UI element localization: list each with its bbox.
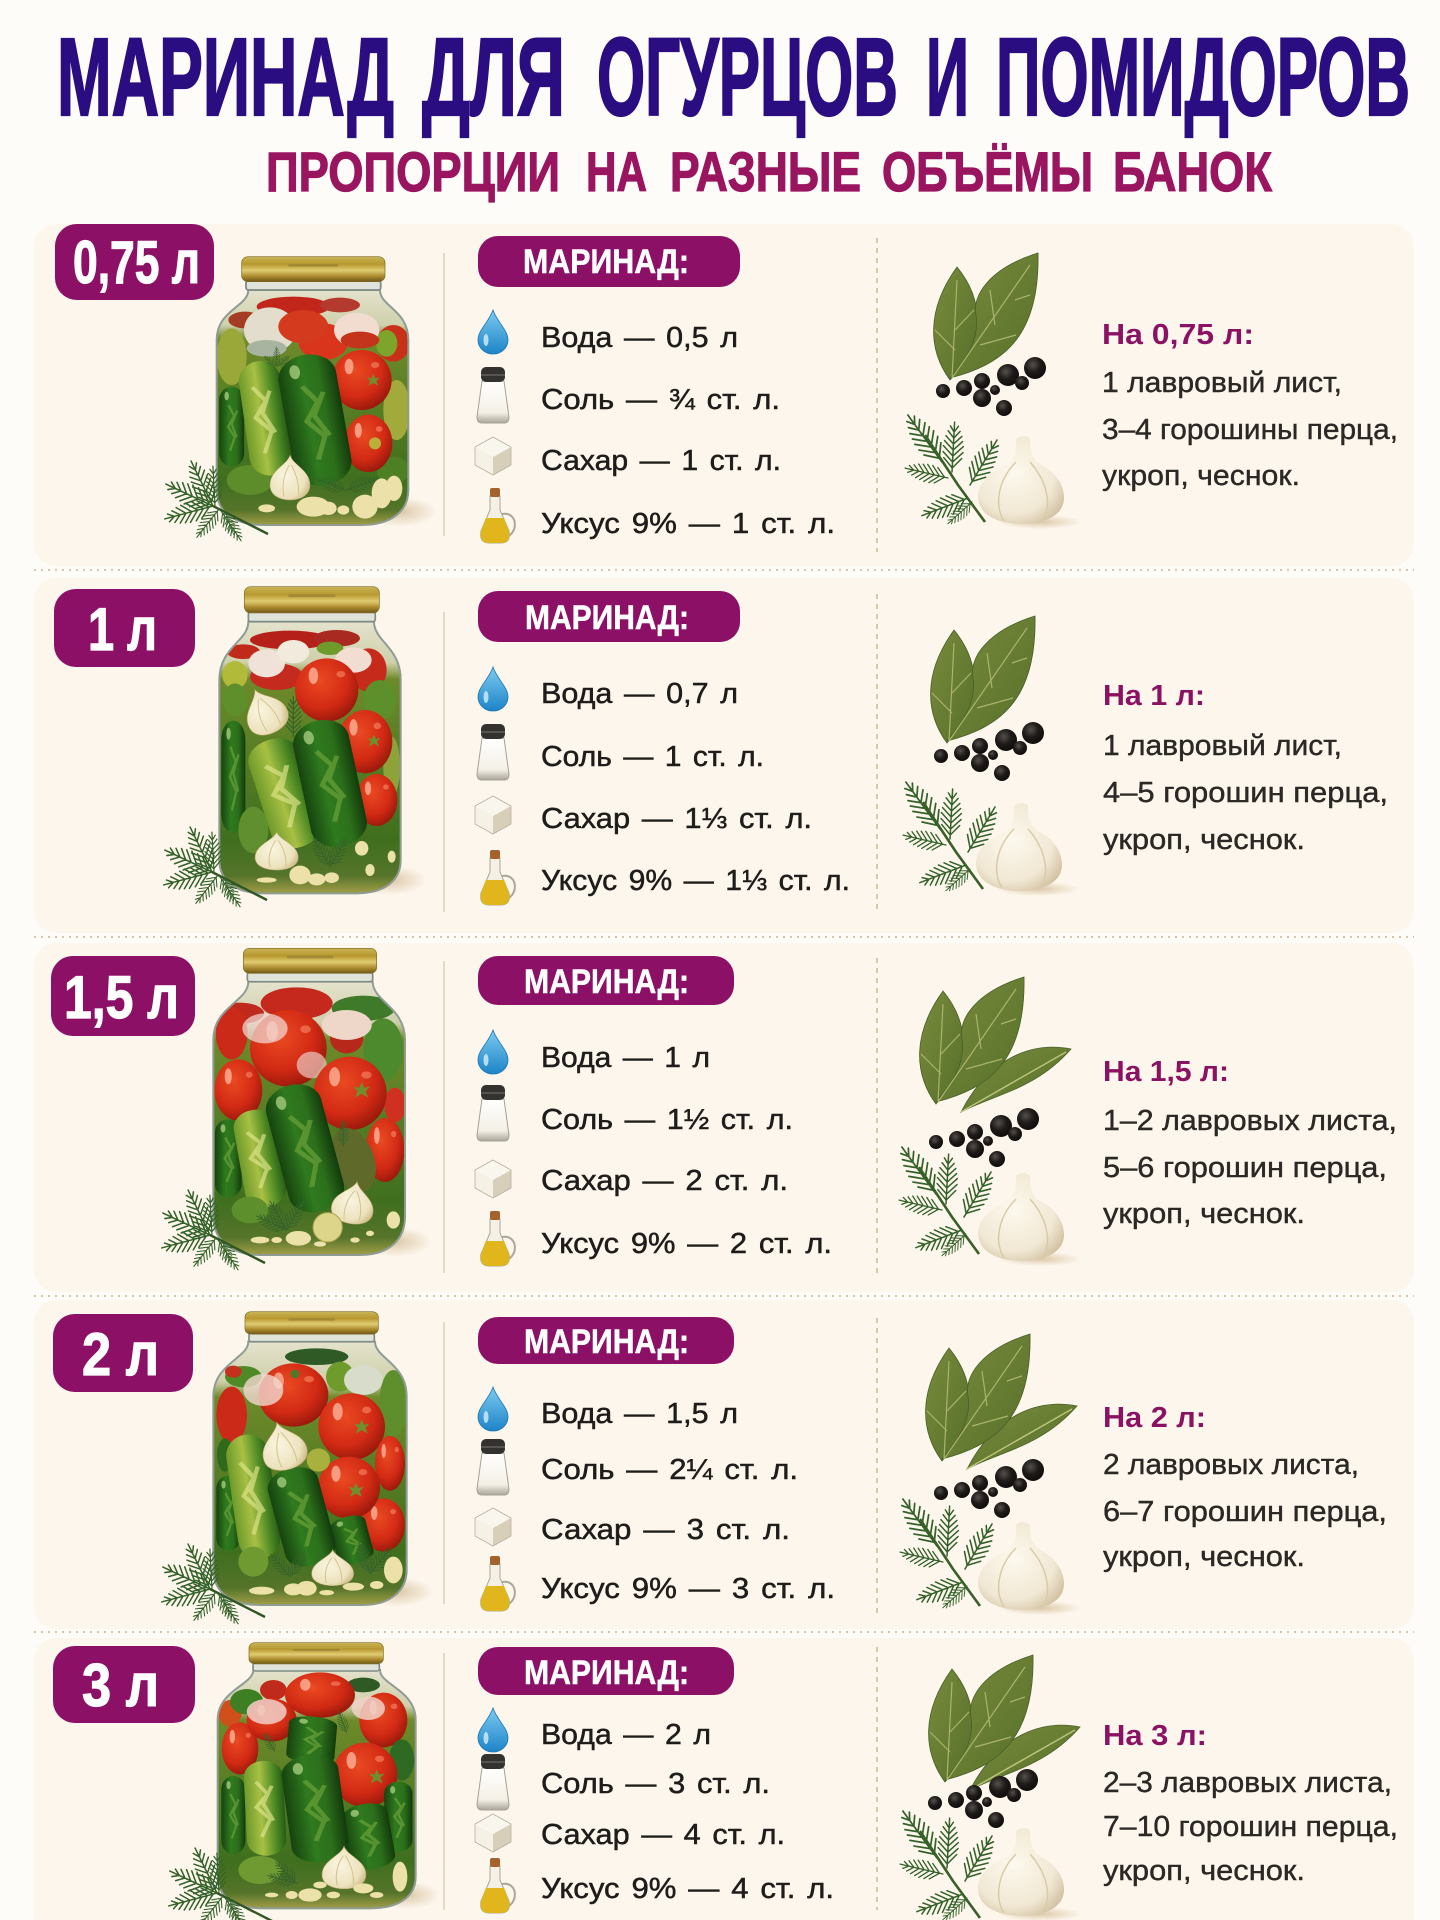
dill at jar: [160, 823, 267, 911]
ingredient: vinegar: [481, 1211, 832, 1266]
jar 1 л: [217, 587, 427, 895]
spices text: укроп, чеснок.: [1103, 1855, 1305, 1887]
spices text: 3–4 горошины перца,: [1102, 414, 1398, 446]
ingredient: salt: Соль — 1½ ст. л.: [541, 1104, 793, 1136]
jar 1,5 л: [210, 948, 432, 1257]
subtitle: [266, 140, 1273, 203]
ingredient: vinegar: [481, 1556, 835, 1611]
ingredient: salt: [477, 1439, 798, 1495]
ingredient: salt: [477, 367, 780, 423]
spices text: На 3 л:: [1103, 1720, 1207, 1752]
spices text: 1–2 лавровых листа,: [1103, 1105, 1397, 1137]
spices text: укроп, чеснок.: [1103, 1198, 1305, 1230]
ingredient: sugar: Сахар — 3 ст. л.: [541, 1514, 790, 1546]
spices text: [1103, 1720, 1398, 1887]
marinade pill: МАРИНАД:: [524, 1654, 689, 1692]
spices text: На 0,75 л:: [1102, 319, 1254, 351]
spices text: [1103, 1056, 1397, 1230]
ingredient: vinegar: Уксус 9% — 2 ст. л.: [541, 1228, 832, 1260]
title: ОГУРЦОВ: [597, 16, 898, 139]
ingredient: salt: Соль — 2¼ ст. л.: [541, 1454, 798, 1486]
subtitle: РАЗНЫЕ: [670, 140, 861, 203]
ingredient: water: Вода — 0,5 л: [541, 322, 738, 354]
subtitle: НА: [586, 140, 647, 203]
jar 2 л: [210, 1312, 433, 1607]
ingredient: vinegar: Уксус 9% — 3 ст. л.: [541, 1573, 835, 1605]
dill at jar: [165, 1844, 272, 1920]
title: МАРИНАД: [57, 16, 394, 139]
marinade pill: МАРИНАД:: [523, 243, 689, 281]
spices text: На 2 л:: [1103, 1402, 1206, 1434]
subtitle: БАНОК: [1113, 140, 1273, 203]
ingredient: water: Вода — 2 л: [541, 1719, 711, 1751]
spices text: укроп, чеснок.: [1103, 824, 1305, 856]
panel: 1 л: [34, 578, 1414, 933]
ingredient: vinegar: Уксус 9% — 1 ст. л.: [541, 508, 835, 540]
panel: 2 л: [34, 1300, 1414, 1629]
volume badge: [53, 1646, 195, 1723]
spices illustration: [899, 253, 1082, 529]
marinade pill: [478, 956, 734, 1005]
ingredient: vinegar: [481, 850, 850, 905]
title: ДЛЯ: [422, 16, 565, 139]
title: [57, 16, 1410, 139]
ingredient: sugar: [475, 796, 812, 835]
ingredient: salt: [477, 1085, 793, 1141]
volume badge: 0,75 л: [73, 229, 200, 296]
ingredient: water: [478, 667, 738, 711]
spices text: 4–5 горошин перца,: [1103, 777, 1388, 809]
ingredient: sugar: [475, 1508, 790, 1546]
ingredient: sugar: Сахар — 1 ст. л.: [541, 445, 781, 477]
volume badge: 2 л: [82, 1321, 159, 1388]
ingredient: salt: Соль — 1 ст. л.: [541, 741, 764, 773]
spices text: 7–10 горошин перца,: [1103, 1811, 1398, 1843]
spices text: [1103, 1402, 1387, 1573]
marinade pill: МАРИНАД:: [524, 963, 689, 1001]
volume badge: 3 л: [82, 1652, 159, 1719]
ingredient: water: Вода — 1 л: [541, 1042, 710, 1074]
spices text: 5–6 горошин перца,: [1103, 1152, 1387, 1184]
ingredient: water: Вода — 0,7 л: [541, 678, 738, 710]
ingredient: water: [478, 1708, 711, 1752]
dill at jar: [158, 1540, 265, 1628]
spices text: 1 лавровый лист,: [1103, 730, 1342, 762]
ingredient: sugar: [475, 1160, 788, 1198]
spices text: 2 лавровых листа,: [1103, 1449, 1359, 1481]
spices text: 1 лавровый лист,: [1102, 367, 1342, 399]
dill at jar: [161, 457, 268, 545]
ingredient: salt: Соль — ¾ ст. л.: [541, 384, 780, 416]
volume badge: [53, 1314, 193, 1392]
spices text: [1103, 680, 1388, 856]
jar 0,75 л: [213, 257, 437, 527]
ingredient: water: [478, 1030, 710, 1074]
subtitle: ПРОПОРЦИИ: [266, 140, 560, 203]
spices text: 2–3 лавровых листа,: [1103, 1767, 1392, 1799]
volume badge: 1 л: [88, 596, 157, 663]
ingredient: vinegar: [481, 1858, 834, 1913]
spices text: На 1,5 л:: [1103, 1056, 1229, 1088]
volume badge: [54, 589, 195, 667]
subtitle: ОБЪЁМЫ: [882, 140, 1093, 203]
marinade pill: [478, 236, 740, 287]
title: И: [926, 16, 969, 139]
ingredient: salt: [477, 1754, 770, 1810]
spices illustration: [894, 1655, 1082, 1920]
ingredient: water: [478, 310, 738, 354]
marinade pill: МАРИНАД:: [525, 599, 689, 637]
spices text: [1102, 319, 1398, 492]
spices illustration: [894, 1334, 1082, 1615]
ingredient: water: [478, 1387, 738, 1431]
panel: 0,75 л: [34, 224, 1414, 566]
ingredient: sugar: Сахар — 2 ст. л.: [541, 1165, 788, 1197]
spices text: укроп, чеснок.: [1103, 1541, 1305, 1573]
spices text: укроп, чеснок.: [1102, 460, 1300, 492]
ingredient: sugar: [475, 437, 781, 477]
spices text: На 1 л:: [1103, 680, 1205, 712]
ingredient: vinegar: Уксус 9% — 1⅓ ст. л.: [541, 865, 850, 897]
marinade pill: [478, 591, 740, 642]
ingredient: sugar: Сахар — 1⅓ ст. л.: [541, 803, 812, 835]
marinade pill: [478, 1317, 734, 1364]
spices illustration: [897, 616, 1080, 896]
marinade pill: [478, 1647, 734, 1695]
dill at jar: [158, 1186, 265, 1274]
ingredient: vinegar: [481, 488, 835, 543]
ingredient: sugar: [475, 1814, 785, 1852]
jar 3 л: [215, 1643, 440, 1910]
ingredient: water: Вода — 1,5 л: [541, 1398, 738, 1430]
marinade pill: МАРИНАД:: [524, 1323, 689, 1361]
ingredient: sugar: Сахар — 4 ст. л.: [541, 1819, 785, 1851]
ingredient: salt: Соль — 3 ст. л.: [541, 1768, 770, 1800]
spices text: 6–7 горошин перца,: [1103, 1496, 1387, 1528]
spices illustration: [893, 977, 1082, 1266]
ingredient: salt: [477, 724, 764, 780]
panel: 1,5 л: [34, 943, 1414, 1292]
volume badge: 1,5 л: [64, 964, 179, 1031]
volume badge: [55, 224, 214, 300]
ingredient: vinegar: Уксус 9% — 4 ст. л.: [541, 1873, 834, 1905]
panel: 3 л: [34, 1638, 1414, 1920]
